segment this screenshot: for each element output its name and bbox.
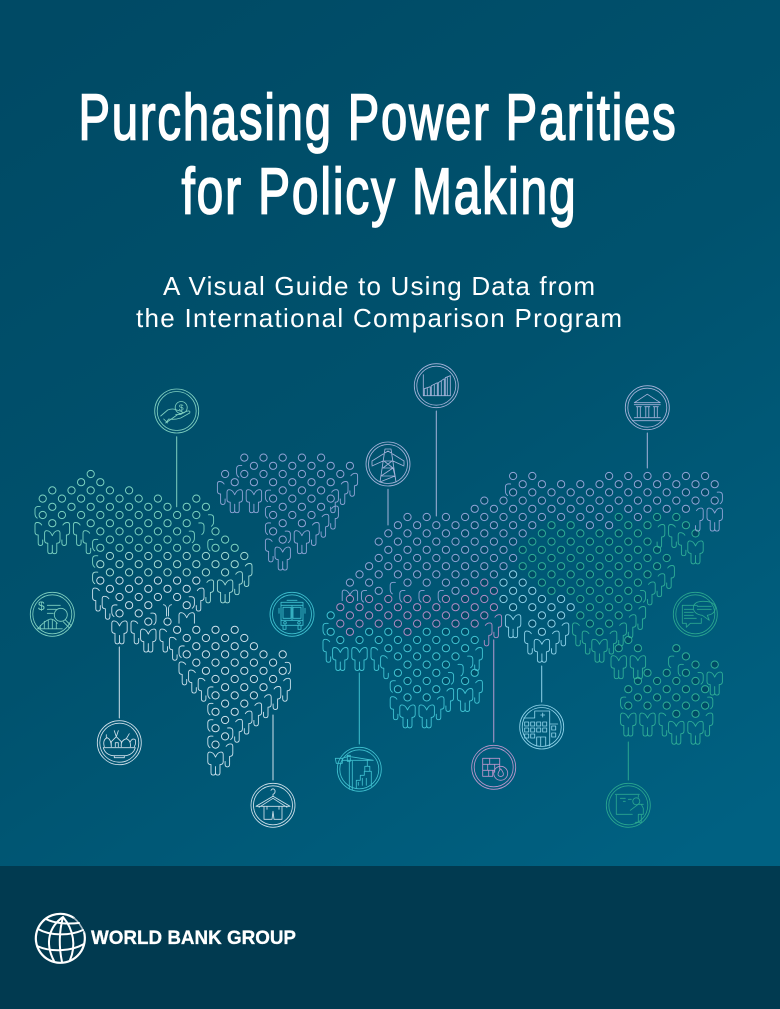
icon: chat and document bbox=[673, 592, 717, 636]
icon: hand holding coin with connector: $ bbox=[179, 402, 184, 412]
icon: bank building with connector bbox=[625, 386, 669, 468]
icon: magnifier over statistics bbox=[30, 592, 74, 636]
map: north america bbox=[33, 474, 254, 660]
title bbox=[78, 80, 678, 228]
title: for Policy Making bbox=[182, 154, 578, 228]
icon: hospital with connector bbox=[520, 666, 564, 749]
map: greenland bbox=[216, 458, 360, 570]
logo: world bank globe bbox=[36, 914, 85, 963]
map: africa bbox=[321, 583, 504, 728]
subtitle: the International Comparison Program bbox=[136, 303, 622, 333]
icon: bowl of food with connector bbox=[97, 647, 141, 765]
icon: bricks and water drop with connector bbox=[472, 640, 516, 789]
icon: bus bbox=[270, 592, 314, 636]
map: eurasia bbox=[340, 476, 724, 662]
icon: magnifier over statistics: $ bbox=[38, 599, 45, 613]
icon: power pylon with connector bbox=[366, 442, 410, 525]
map: australia bbox=[609, 648, 724, 744]
subtitle: A Visual Guide to Using Data from bbox=[163, 271, 595, 301]
logo: wordmark: WORLD BANK GROUP bbox=[91, 927, 296, 949]
footer band bbox=[0, 866, 780, 1009]
icon: hanger with clothes and connector bbox=[251, 715, 295, 827]
icon: teacher at board with connector bbox=[606, 742, 650, 827]
map: south america bbox=[168, 630, 292, 775]
icon: bar chart with connector bbox=[414, 364, 458, 516]
subtitle bbox=[136, 271, 622, 333]
icon: construction crane with connector bbox=[335, 673, 381, 791]
icon: hand holding coin with connector bbox=[155, 389, 199, 507]
